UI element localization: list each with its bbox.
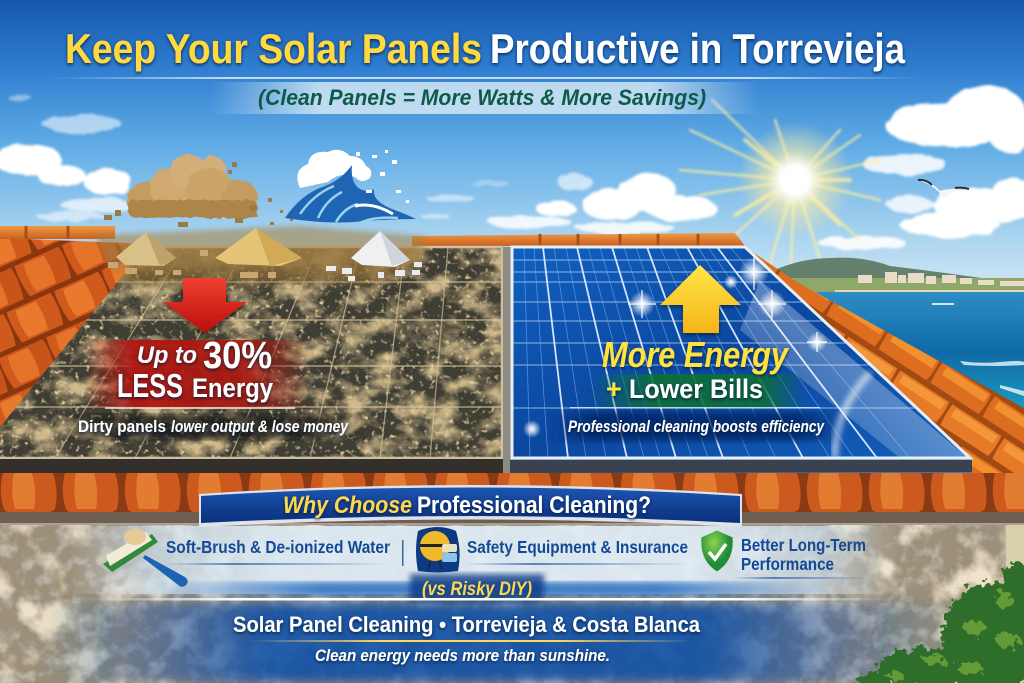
more energy text: [602, 334, 790, 404]
less energy text: Energy: [192, 373, 273, 403]
more energy text: Lower Bills: [629, 374, 763, 404]
subtitle: (Clean Panels = More Watts & More Savings): [258, 85, 706, 110]
wall: [0, 525, 1024, 683]
heading banner: [199, 485, 742, 527]
green band: [590, 374, 805, 408]
dust cloud: [95, 154, 425, 270]
less energy text: LESS: [117, 367, 183, 404]
gold rule: [248, 640, 693, 642]
benefit label: Safety Equipment & Insurance: [467, 537, 688, 557]
benefit: soft brush: [103, 529, 391, 587]
mountain and town: [770, 258, 1024, 296]
sky background: [0, 0, 1024, 295]
panel: dirty solar panel: [0, 235, 504, 473]
seagull: [918, 180, 969, 197]
roof ridge: [0, 226, 745, 246]
benefit label: Performance: [741, 554, 834, 574]
icon: brush: [103, 529, 188, 587]
lower roof eave: [0, 473, 1024, 527]
benefit label: Better Long-Term: [741, 535, 866, 555]
separator: [80, 598, 895, 600]
bush: [857, 561, 1024, 683]
caption: dirty panels: lower output & lose money: [171, 418, 349, 436]
icon: yellow up arrow: [660, 265, 741, 333]
service line: Solar Panel Cleaning • Torrevieja & Costa Blanca: [233, 612, 701, 637]
lower blue band: [40, 602, 960, 683]
sea: [790, 292, 1024, 412]
dirty panel frame: [0, 247, 502, 458]
pale info band: [70, 526, 900, 594]
panel: clean solar panel: [510, 247, 972, 473]
icon: red down arrow: [163, 278, 247, 333]
callout: less energy: [85, 278, 310, 409]
more energy text: More Energy: [602, 334, 790, 375]
dirty panel surface: [0, 235, 503, 459]
clouds: [0, 86, 1024, 250]
vs risky diy: [150, 574, 830, 602]
left roof tiles: [0, 238, 150, 430]
divider: [402, 540, 404, 566]
icon: green shield: [701, 530, 733, 572]
tagline: Clean energy needs more than sunshine.: [315, 646, 610, 665]
vs risky diy: (vs Risky DIY): [422, 579, 532, 600]
caption: dirty panels: Dirty panels: [78, 418, 166, 436]
right roof tiles: [745, 247, 1024, 520]
subtitle: [210, 82, 760, 114]
icon: wave: [285, 150, 416, 224]
sun: [680, 100, 880, 280]
benefit: safety: [416, 527, 691, 572]
heading text: Professional Cleaning?: [417, 492, 651, 519]
caption: dirty panels: [60, 415, 365, 439]
less energy text: [117, 335, 273, 404]
caption: professional cleaning: Professional cleaning boosts efficiency: [568, 418, 825, 436]
heading text: [283, 492, 651, 519]
clean panel frame: [512, 247, 970, 458]
heading text: Why Choose: [283, 492, 412, 519]
sparkles: [523, 254, 827, 438]
benefit label: Soft-Brush & De-ionized Water: [166, 537, 390, 557]
icon: safety helmet badge: [416, 527, 460, 572]
benefit: performance: [701, 530, 871, 579]
less energy text: 30%: [203, 335, 272, 377]
clean panel surface: [512, 247, 972, 459]
panel gap: [503, 247, 511, 473]
callout: more energy: [570, 265, 820, 408]
title rule: [50, 77, 920, 79]
red band: [85, 340, 310, 408]
title: Productive in Torrevieja: [490, 25, 906, 72]
more energy text: +: [606, 374, 622, 404]
title: Keep Your Solar Panels: [65, 25, 482, 72]
sand piles and salt: [108, 228, 422, 281]
less energy text: Up to: [137, 342, 197, 369]
caption: professional cleaning: [548, 412, 843, 441]
title: [65, 25, 906, 72]
